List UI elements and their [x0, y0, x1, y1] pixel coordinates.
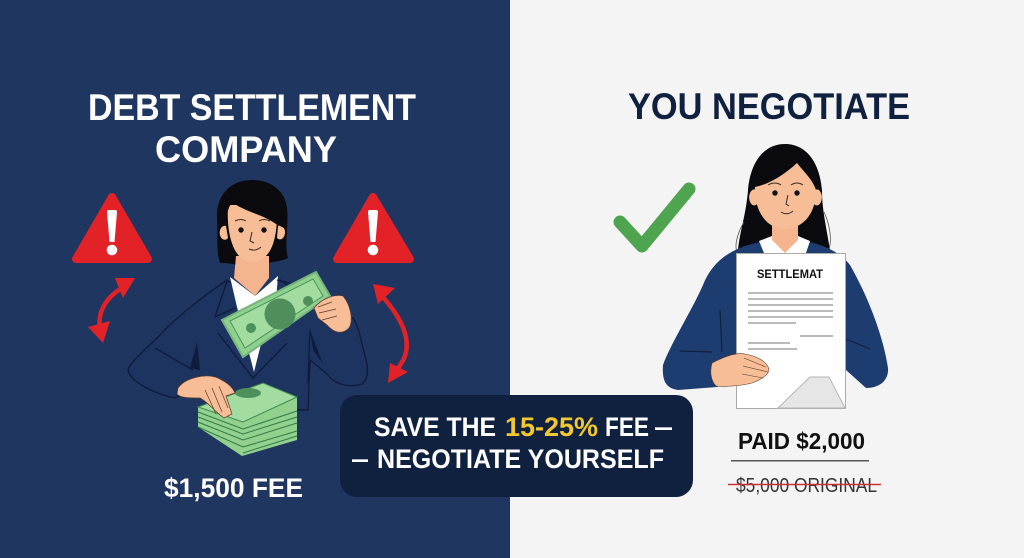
banknote held	[222, 272, 330, 357]
document fold	[778, 377, 845, 408]
suit shadows	[190, 330, 323, 370]
cash stack	[198, 383, 297, 456]
woman hair back	[217, 180, 288, 266]
document text lines	[748, 293, 833, 349]
icon: warning triangle left	[76, 197, 148, 259]
left hand	[177, 376, 235, 418]
callout line 1	[374, 412, 672, 442]
figure: company woman with money	[128, 180, 368, 456]
document title: SETTLEMAT	[757, 269, 823, 281]
woman facial features	[768, 183, 803, 214]
divider under paid amount	[731, 460, 869, 462]
woman shirt	[230, 276, 278, 372]
woman ears	[220, 225, 285, 240]
arrow: right double-headed curve	[373, 284, 408, 383]
callout line 2: NEGOTIATE YOURSELF	[377, 444, 664, 474]
callout line 1: FEE	[605, 412, 649, 442]
heading: debt settlement company	[88, 87, 416, 170]
panel: debt settlement company	[0, 0, 510, 558]
woman face	[228, 205, 277, 262]
callout line 1: —	[655, 412, 672, 442]
hand	[711, 354, 769, 386]
heading: debt settlement company: DEBT SETTLEMENT	[88, 87, 416, 128]
woman hair fringe	[224, 182, 285, 228]
woman hair outline	[736, 212, 830, 252]
woman ears	[749, 189, 822, 205]
woman neck	[234, 256, 269, 296]
woman lapels	[155, 280, 310, 383]
woman collar	[759, 236, 810, 253]
callout line 1: 15-25%	[505, 412, 598, 442]
arrow: left double-headed curve	[88, 278, 135, 343]
right hand	[314, 296, 351, 332]
woman facial features	[235, 220, 270, 250]
woman hair	[738, 144, 830, 250]
figure: woman holding settlement document	[663, 144, 888, 408]
icon: warning triangle right	[337, 197, 410, 259]
label: paid $2,000: PAID $2,000	[738, 428, 865, 454]
woman neck	[772, 222, 798, 253]
callout line 2: —	[352, 444, 368, 474]
callout banner	[340, 395, 693, 497]
callout line 1: SAVE THE	[374, 412, 496, 442]
woman sweater	[663, 242, 888, 390]
woman suit	[128, 280, 368, 410]
heading: debt settlement company: COMPANY	[155, 129, 337, 170]
woman face	[755, 163, 816, 229]
label: $5,000 original struck through: $5,000 ORIGINAL	[736, 475, 877, 497]
icon: green check mark	[620, 189, 689, 246]
document	[736, 254, 846, 408]
panel: you negotiate	[510, 0, 1024, 558]
heading: you negotiate: YOU NEGOTIATE	[628, 86, 910, 127]
label: $1,500 fee: $1,500 FEE	[164, 473, 303, 503]
sleeve creases	[680, 310, 870, 352]
